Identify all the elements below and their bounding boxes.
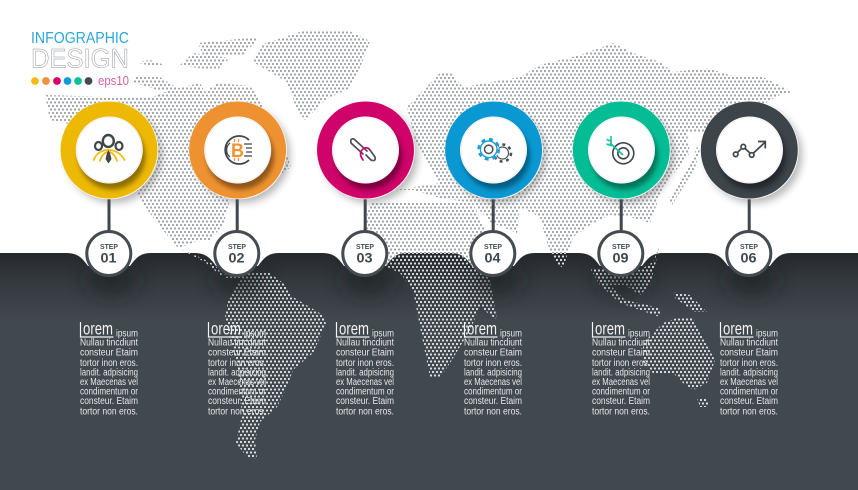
step shadows on band [88, 266, 776, 294]
text block 6: condimentum or [720, 386, 779, 398]
text block 2: tortor non eros. [208, 406, 266, 418]
text block 6: consteur Etaim [720, 348, 778, 358]
step 3 group [317, 101, 418, 418]
text block 2: tortor inon eros. [208, 358, 266, 369]
connector 5 [620, 197, 623, 233]
text block 2: landit. adpisicing [208, 368, 266, 378]
step badge 4: STEP [484, 242, 502, 251]
text block 3 [336, 318, 395, 418]
text block 1: consteur. Etaim [80, 396, 138, 407]
connector 6 [748, 197, 751, 233]
title: INFOGRAPHIC: INFOGRAPHIC [31, 30, 129, 47]
text block 6 [720, 318, 779, 418]
text block 5: ex Maecenas vel [592, 377, 650, 388]
text block 5: consteur. Etaim [592, 396, 650, 407]
step badge 6: 06 [740, 250, 757, 266]
text block 5: tortor inon eros. [592, 358, 650, 369]
text block 3: tortor non eros. [336, 406, 394, 418]
step badge 6 [727, 232, 771, 276]
ring 6 [701, 101, 802, 203]
text block 5: tortor non eros. [592, 406, 650, 418]
connector 1 [108, 197, 110, 233]
step badge 1: 01 [100, 250, 117, 266]
text block 2: ipsum [244, 328, 266, 340]
step badge 4 [471, 232, 515, 276]
text block 4: landit. adpisicing [464, 368, 522, 378]
text block 6: tortor non eros. [720, 406, 778, 418]
colour dots [31, 77, 92, 85]
text block 1 [80, 318, 139, 418]
text block 1: tortor inon eros. [80, 358, 138, 369]
step badge 5: 09 [612, 250, 629, 266]
dotted world map on dark band [188, 253, 715, 459]
step badge 6: STEP [740, 242, 758, 251]
text block 4: consteur Etaim [464, 348, 522, 358]
text block 1: tortor non eros. [80, 406, 138, 418]
text block 5: Nullau tincdiunt [592, 338, 650, 348]
text block 2: consteur Etaim [208, 348, 266, 358]
ring 1 [60, 101, 162, 203]
text block 5: condimentum or [592, 386, 651, 398]
icon: chain link [351, 139, 375, 161]
icon: bitcoin [225, 136, 252, 164]
ring 5 [573, 101, 674, 203]
text block 4: condimentum or [464, 386, 523, 398]
text block 3: orem [339, 318, 369, 338]
step 4 group [445, 101, 546, 418]
text block 1: landit. adpisicing [80, 368, 138, 378]
text block 3: ex Maecenas vel [336, 377, 394, 388]
text block 2: orem [211, 318, 241, 338]
text block 3: consteur Etaim [336, 348, 394, 358]
step badge 2: 02 [228, 250, 245, 266]
text block 5: ipsum [628, 328, 650, 340]
eps10 label: eps10 [98, 73, 129, 88]
step badge 3: STEP [356, 242, 374, 251]
text block 3: consteur. Etaim [336, 396, 394, 407]
text block 1: orem [83, 318, 113, 338]
text block 4: tortor inon eros. [464, 358, 522, 369]
step 2 group [189, 101, 290, 418]
title block [31, 30, 129, 88]
text block 4: consteur. Etaim [464, 396, 522, 407]
step badge 5 [599, 232, 643, 276]
text block 2: ex Maecenas vel [208, 377, 266, 388]
text block 2 [208, 318, 267, 418]
text block 3: ipsum [372, 328, 394, 340]
text block 4: orem [467, 318, 497, 338]
step badge 2 [215, 232, 259, 276]
text block 6: ex Maecenas vel [720, 377, 778, 388]
icon: people [94, 135, 124, 164]
text block 5: orem [595, 318, 625, 338]
text block 4: ipsum [500, 328, 522, 340]
text block 6: consteur. Etaim [720, 396, 778, 407]
text block 4: ex Maecenas vel [464, 377, 522, 388]
text block 4: tortor non eros. [464, 406, 522, 418]
text block 3: landit. adpisicing [336, 368, 394, 378]
ring 3 [317, 101, 418, 203]
step badge 5: STEP [612, 242, 630, 251]
step badge 4: 04 [484, 250, 501, 266]
step badge 2: STEP [228, 242, 246, 251]
text block 2: condimentum or [208, 386, 267, 398]
text block 6: ipsum [756, 328, 778, 340]
text block 6: Nullau tincdiunt [720, 338, 778, 348]
text block 1: Nullau tincdiunt [80, 338, 138, 348]
step badge 3 [343, 232, 387, 276]
step 1 group [60, 101, 162, 418]
text block 1: condimentum or [80, 386, 139, 398]
step badge 3: 03 [356, 250, 373, 266]
text block 3: tortor inon eros. [336, 358, 394, 369]
text block 5: landit. adpisicing [592, 368, 650, 378]
dark lower band [0, 253, 858, 490]
text block 1: ex Maecenas vel [80, 377, 138, 388]
step 6 group [701, 101, 802, 418]
text block 1: consteur Etaim [80, 348, 138, 358]
ring 4 [445, 101, 546, 203]
text block 6: orem [723, 318, 753, 338]
ring 2 [189, 101, 290, 203]
connector 2 [236, 197, 239, 233]
icon: bitcoin: B [231, 141, 244, 162]
text block 2: Nullau tincdiunt [208, 338, 266, 348]
text block 6: landit. adpisicing [720, 368, 778, 378]
text block 4 [464, 318, 523, 418]
text block 3: Nullau tincdiunt [336, 338, 394, 348]
connector 3 [364, 197, 367, 233]
icon: growth chart arrow [733, 142, 765, 157]
text block 5: consteur Etaim [592, 348, 650, 358]
title: DESIGN: DESIGN [31, 44, 129, 74]
text block 5 [592, 318, 651, 418]
step badge 1 [87, 232, 131, 276]
text block 3: condimentum or [336, 386, 395, 398]
text block 4: Nullau tincdiunt [464, 338, 522, 348]
text block 2: consteur. Etaim [208, 396, 266, 407]
dotted world map on light background [45, 30, 792, 459]
step 5 group [573, 101, 674, 418]
icon: target [606, 136, 634, 164]
step badge 1: STEP [100, 242, 118, 251]
text block 1: ipsum [116, 328, 138, 340]
connector 4 [492, 197, 495, 233]
icon: gears [479, 139, 511, 162]
text block 6: tortor inon eros. [720, 358, 778, 369]
